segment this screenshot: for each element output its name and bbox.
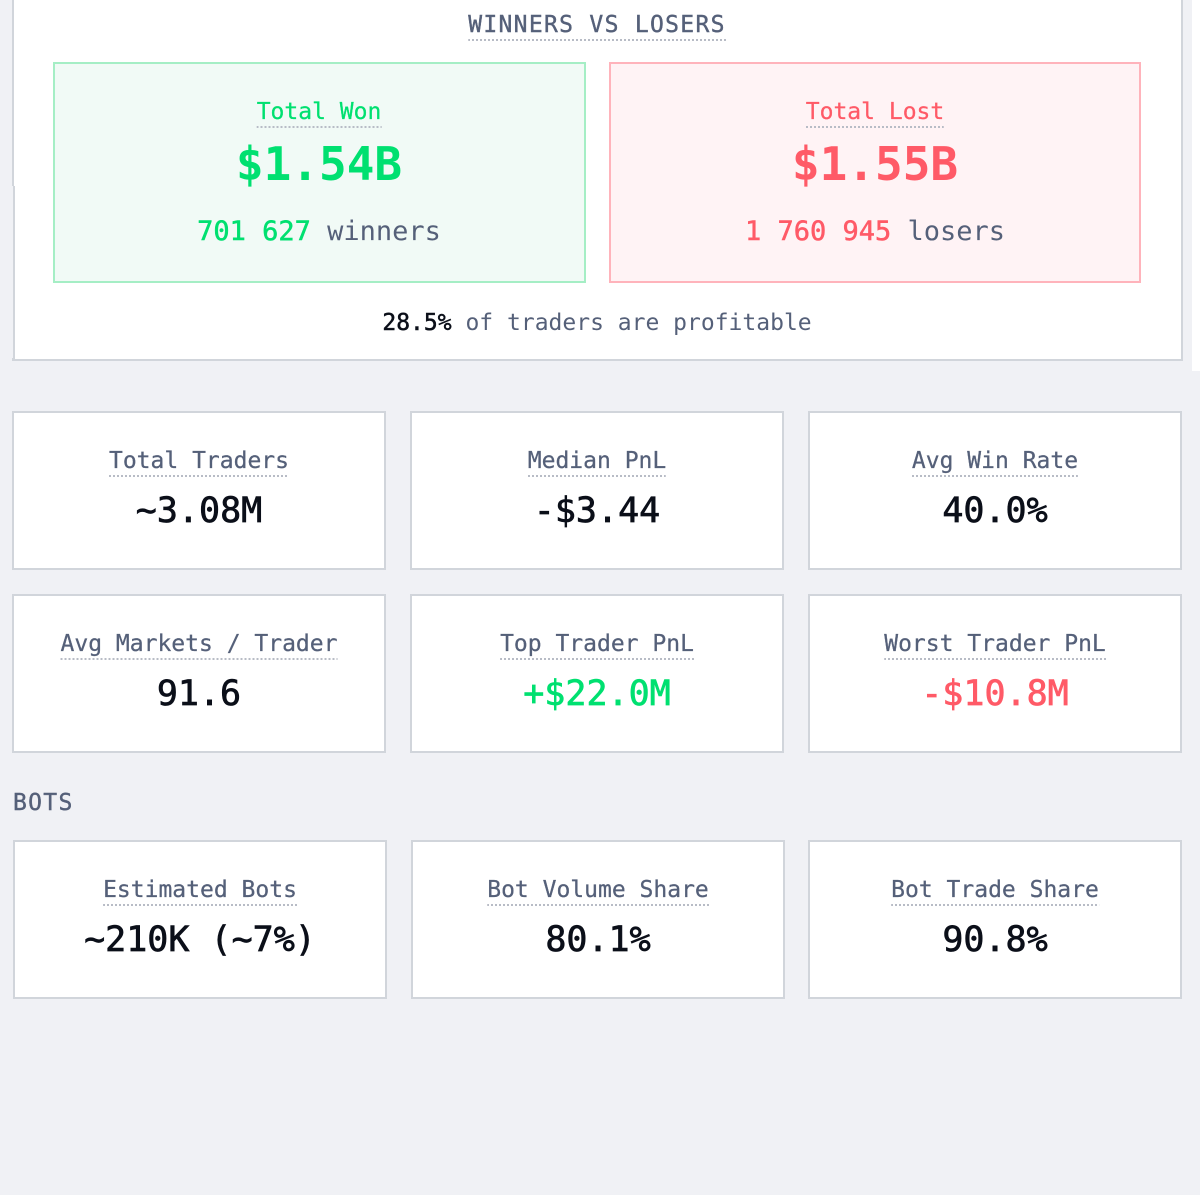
card: total lost xyxy=(609,62,1141,283)
label: Estimated Bots xyxy=(103,877,297,903)
value: ~210K (~7%) xyxy=(84,920,316,960)
label: Median PnL xyxy=(528,448,666,474)
profitable share note: 28.5% of traders are profitable xyxy=(382,310,812,336)
label: Avg Markets / Trader xyxy=(61,631,337,657)
label: Top Trader PnL xyxy=(500,631,694,657)
value: 91.6 xyxy=(157,674,241,714)
value: -$10.8M xyxy=(921,674,1069,714)
stat card: median pnl xyxy=(410,411,784,570)
card: total won xyxy=(53,62,586,283)
stat card: avg win rate xyxy=(808,411,1182,570)
value: +$22.0M xyxy=(523,674,671,714)
label: Total Traders xyxy=(109,448,289,474)
label: Worst Trader PnL xyxy=(884,631,1106,657)
stat card: estimated bots xyxy=(13,840,387,999)
stat card: avg markets per trader xyxy=(12,594,386,753)
panel: winners vs losers xyxy=(12,0,1183,361)
heading: bots: BOTS xyxy=(13,790,74,816)
value: total won: $1.54B xyxy=(236,137,402,191)
stat card: bot trade share xyxy=(808,840,1182,999)
value: 90.8% xyxy=(942,920,1048,960)
value: total lost: $1.55B xyxy=(792,137,958,191)
stat card: bot volume share xyxy=(411,840,785,999)
value: 80.1% xyxy=(545,920,651,960)
value: 40.0% xyxy=(942,491,1048,531)
label: Bot Trade Share xyxy=(891,877,1099,903)
stat card: worst trader pnl xyxy=(808,594,1182,753)
value: -$3.44 xyxy=(534,491,660,531)
label: Avg Win Rate xyxy=(912,448,1078,474)
heading: winners vs losers: WINNERS VS LOSERS xyxy=(468,12,726,38)
label: total won: Total Won xyxy=(257,99,381,125)
value: ~3.08M xyxy=(136,491,262,531)
label: Bot Volume Share xyxy=(487,877,709,903)
stat card: total traders xyxy=(12,411,386,570)
stat card: top trader pnl xyxy=(410,594,784,753)
label: total lost: Total Lost xyxy=(806,99,944,125)
winners count: 701 627 winners xyxy=(197,216,441,247)
losers count: 1 760 945 losers xyxy=(745,216,1005,247)
